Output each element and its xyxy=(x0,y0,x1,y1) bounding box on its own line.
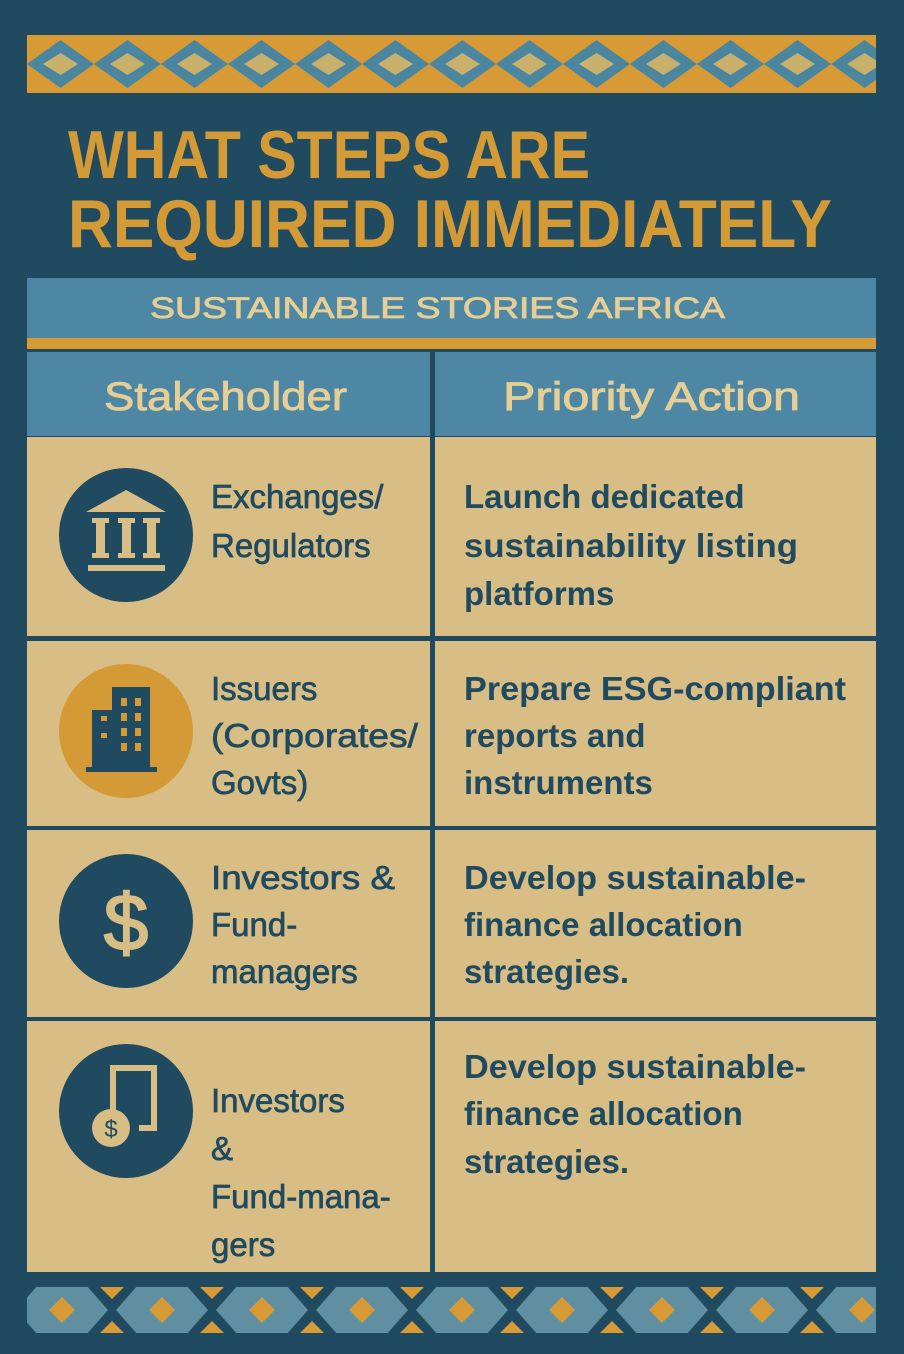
row 3: investors: Fund- xyxy=(211,906,297,943)
row 1: exchanges/regulators: sustainability listing xyxy=(464,527,798,564)
row 3: investors: Develop sustainable- xyxy=(464,859,806,896)
row 1: exchanges/regulators xyxy=(59,468,798,612)
row 3: investors xyxy=(59,854,806,990)
row 2: issuers: (Corporates/ xyxy=(211,717,419,754)
table header xyxy=(27,352,876,1272)
icon: dollar xyxy=(59,854,193,988)
table rows background xyxy=(27,437,876,1272)
row 4: investors 2: finance allocation xyxy=(464,1095,743,1132)
row 3: investors: Investors & xyxy=(211,859,395,896)
row 4: investors 2: & xyxy=(211,1130,233,1167)
title: WHAT STEPS ARE xyxy=(68,117,590,193)
row 4: investors 2 xyxy=(59,1044,806,1263)
row 3: investors: managers xyxy=(211,953,358,990)
icon: dollar: $ xyxy=(104,878,148,967)
bottom pattern band xyxy=(27,1287,876,1333)
icon: coin with frame: $ xyxy=(104,1116,118,1143)
row 2: issuers: instruments xyxy=(464,764,653,801)
table header: Stakeholder xyxy=(104,375,347,419)
row 4: investors 2: Develop sustainable- xyxy=(464,1048,806,1085)
row 3: investors: finance allocation xyxy=(464,906,743,943)
row 1: exchanges/regulators: Exchanges/ xyxy=(211,478,384,515)
row 2: issuers: Govts) xyxy=(211,764,308,801)
title: REQUIRED IMMEDIATELY xyxy=(68,186,832,262)
row 1: exchanges/regulators: Launch dedicated xyxy=(464,478,745,515)
row 2: issuers: reports and xyxy=(464,717,646,754)
row 4: investors 2: Investors xyxy=(211,1082,345,1119)
subtitle band: SUSTAINABLE STORIES AFRICA xyxy=(150,292,725,325)
row 2: issuers: Issuers xyxy=(211,670,317,707)
row 4: investors 2: strategies. xyxy=(464,1143,629,1180)
subtitle band xyxy=(27,278,876,349)
row 4: investors 2: Fund-mana- xyxy=(211,1178,391,1215)
row 4: investors 2: gers xyxy=(211,1226,275,1263)
icon: building xyxy=(59,664,193,798)
row 2: issuers: Prepare ESG-compliant xyxy=(464,670,846,707)
top pattern band xyxy=(27,35,876,93)
row 3: investors: strategies. xyxy=(464,953,629,990)
row 1: exchanges/regulators: platforms xyxy=(464,575,614,612)
row 2: issuers xyxy=(59,664,846,801)
title xyxy=(68,117,832,262)
table header: Priority Action xyxy=(503,375,800,419)
row 1: exchanges/regulators: Regulators xyxy=(211,527,371,564)
icon: bank xyxy=(59,468,193,602)
icon: coin with frame xyxy=(59,1044,193,1178)
